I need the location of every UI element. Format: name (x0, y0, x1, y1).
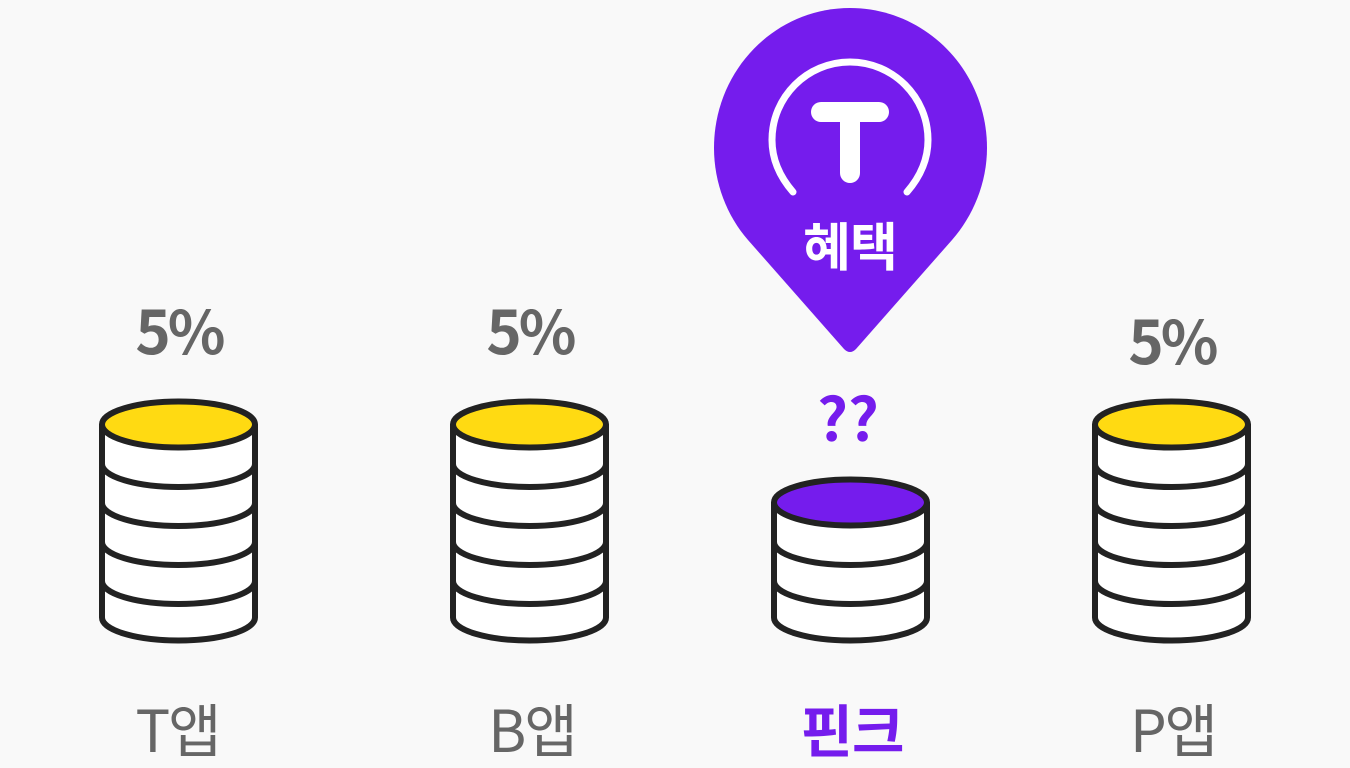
icon: T logo with arc (772, 62, 928, 192)
label: T app: T앱 (135, 685, 220, 768)
label: P app: P앱 (1130, 685, 1216, 768)
column: B app (453, 285, 606, 768)
icon: coin stack T app (102, 402, 255, 640)
percentage: P app 5%: 5% (1128, 295, 1217, 382)
map pin: T benefit (714, 8, 987, 352)
question marks: ?? (817, 372, 879, 459)
column: Pink (714, 8, 987, 768)
pin label: benefit: 혜택 (803, 206, 897, 281)
label: B app: B앱 (488, 685, 576, 768)
label: Pink: 핀크 (801, 687, 903, 768)
pin body (714, 8, 987, 352)
icon: coin stack P app (1095, 402, 1248, 640)
percentage: T app 5%: 5% (135, 285, 224, 372)
icon: coin stack Pink (774, 480, 927, 640)
percentage: B app 5%: 5% (486, 285, 575, 372)
column: P app (1095, 295, 1248, 768)
icon: coin stack B app (453, 402, 606, 640)
column: T app (102, 285, 255, 768)
